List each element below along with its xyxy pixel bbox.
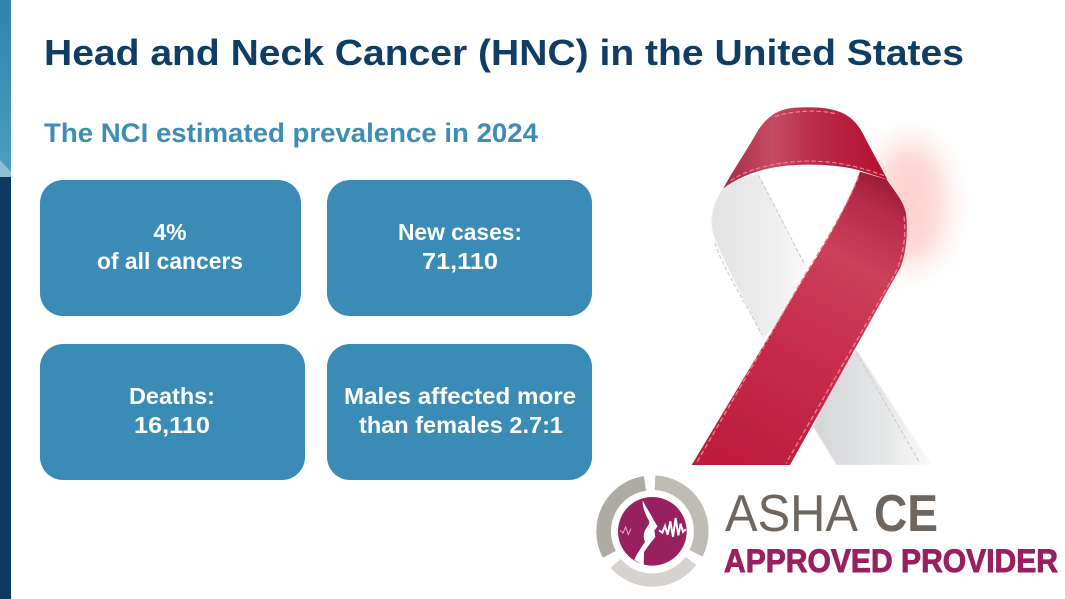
panel: deaths: Deaths: — [129, 383, 215, 409]
title: Head and Neck Cancer (HNC) in the United States — [44, 32, 964, 73]
icon: ASHA circular emblem — [604, 483, 701, 580]
panel: male to female ratio: Males affected more — [344, 383, 576, 409]
text: ASHA CE: CE — [874, 485, 938, 543]
panel: new cases — [327, 180, 592, 316]
panel: male to female ratio — [327, 344, 592, 480]
icon: awareness ribbon — [692, 107, 947, 465]
panel: 4% of all cancers: of all cancers — [97, 248, 243, 274]
logo panel background — [592, 465, 1065, 599]
logo: ASHA CE approved provider — [592, 465, 1065, 599]
panel: male to female ratio: than females 2.7:1 — [359, 412, 563, 438]
panel: deaths — [40, 344, 305, 480]
panel: 4% of all cancers — [40, 180, 301, 316]
panel: 4% of all cancers: 4% — [153, 219, 187, 245]
panel: deaths: 16,110 — [134, 412, 210, 438]
text: ASHA CE — [725, 485, 938, 543]
text: ASHA CE: ASHA — [725, 485, 858, 543]
panel: new cases: New cases: — [398, 219, 522, 245]
left edge strip — [0, 0, 11, 599]
subtitle: The NCI estimated prevalence in 2024 — [44, 118, 538, 148]
panel: new cases: 71,110 — [422, 248, 498, 274]
